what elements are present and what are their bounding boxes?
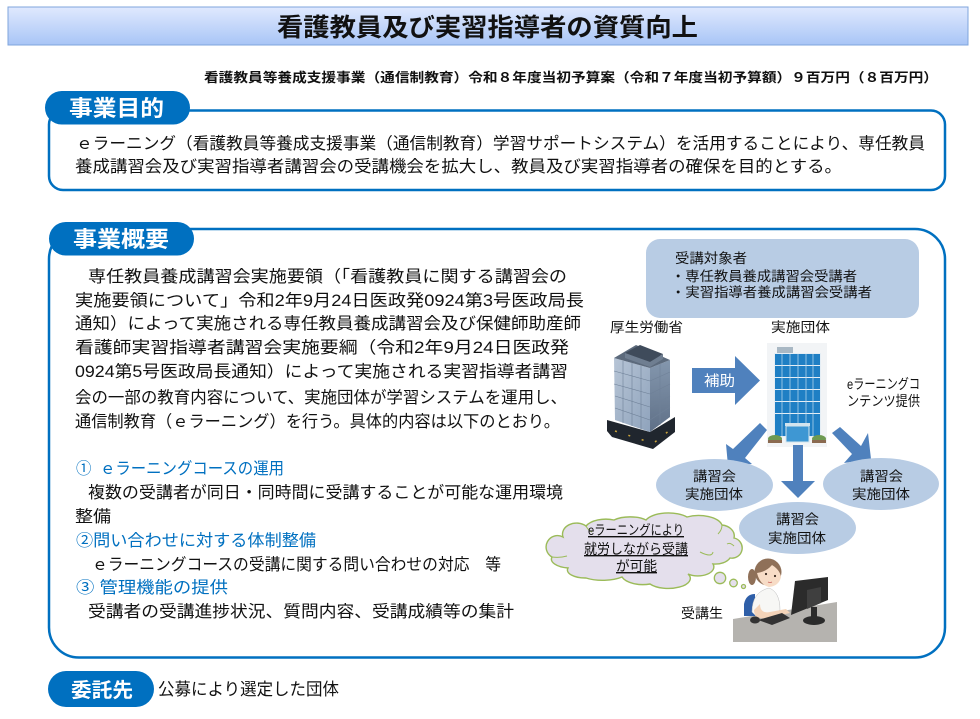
lecture body: centre: 実施団体 <box>768 531 827 546</box>
lecture body: centre: 講習会 <box>776 512 820 527</box>
overview paragraph: 専任教員養成講習会実施要領（「看護教員に関する講習会の <box>88 267 567 286</box>
thought cloud <box>546 513 742 588</box>
target trainees box: ・実習指導者養成講習会受講者 <box>671 284 872 300</box>
overview paragraph: 0924第5号医政局長通知）によって実施される実習指導者講習 <box>75 362 568 381</box>
lecture body: right <box>823 458 939 510</box>
lecture body: left <box>656 459 773 511</box>
item 3: ③ 管理機能の提供 <box>76 578 228 597</box>
label: e-learning content provision: ンテンツ提供 <box>847 393 920 409</box>
item 2 <box>76 531 501 574</box>
thought cloud: 就労しながら受講 <box>584 541 688 557</box>
purpose text: ｅラーニング（看護教員等養成支援事業（通信制教育）学習サポートシステム）を活用することにより、専任教員 <box>76 134 925 153</box>
thought cloud: eラーニングにより <box>588 522 684 538</box>
item 1: ① ｅラーニングコースの運用 <box>76 459 284 478</box>
overview paragraph: 通知）によって実施される専任教員養成講習会及び保健師助産師 <box>75 314 581 333</box>
budget line: 看護教員等養成支援事業（通信制教育）令和８年度当初予算案（令和７年度当初予算額）９百万円（８百万円） <box>204 70 938 85</box>
overview paragraph: 看護師実習指導者講習会実施要綱（令和2年9月24日医政発 <box>75 338 570 357</box>
purpose text: 養成講習会及び実習指導者講習会の受講機会を拡大し、教員及び実習指導者の確保を目的とする。 <box>75 157 842 176</box>
item 1 <box>75 459 563 526</box>
contractor pill <box>48 671 154 707</box>
item 1: 整備 <box>75 507 111 526</box>
thought cloud: が可能 <box>616 558 657 574</box>
lecture body: right: 実施団体 <box>852 487 911 502</box>
icon: ministry building <box>607 345 675 449</box>
label: e-learning content provision <box>847 376 920 409</box>
label: e-learning content provision: eラーニングコ <box>847 376 920 392</box>
overview paragraph <box>75 267 584 431</box>
thought bubbles <box>714 572 746 588</box>
contractor text: 公募により選定した団体 <box>158 680 339 699</box>
heading pill: project overview <box>49 222 194 256</box>
arrow: subsidy: 補助 <box>704 373 735 390</box>
heading pill: project purpose <box>45 91 190 124</box>
overview paragraph: 会の一部の教育内容について、実施団体が学習システムを運用し、 <box>75 388 567 407</box>
label: ministry: 厚生労働省 <box>610 320 683 335</box>
target trainees box: ・専任教員養成講習会受講者 <box>671 268 857 284</box>
lecture body: centre <box>739 502 856 554</box>
lecture body: right: 講習会 <box>860 469 904 484</box>
target trainees box: 受講対象者 <box>675 251 747 266</box>
item 2: ②問い合わせに対する体制整備 <box>76 531 316 550</box>
item 1: 複数の受講者が同日・同時間に受講することが可能な運用環境 <box>88 483 563 502</box>
icon: implementing body building <box>767 343 827 447</box>
arrow: to centre body <box>781 445 815 498</box>
overview paragraph: 実施要領について」令和2年9月24日医政発0924第3号医政局長 <box>75 291 584 310</box>
lecture body: left: 講習会 <box>693 469 737 484</box>
contractor pill: 委託先 <box>71 679 133 702</box>
panel: project overview <box>49 222 945 658</box>
illustration: student at computer <box>733 558 837 642</box>
title: 看護教員及び実習指導者の資質向上 <box>277 14 698 42</box>
item 3 <box>76 578 515 621</box>
target trainees box <box>646 239 919 318</box>
panel: project purpose <box>45 91 945 190</box>
heading pill: project overview: 事業概要 <box>73 227 169 252</box>
item 2: ｅラーニングコースの受講に関する問い合わせの対応 等 <box>92 555 501 574</box>
label: student: 受講生 <box>681 606 723 621</box>
arrow: to left body <box>726 423 767 466</box>
title banner <box>8 7 968 45</box>
overview paragraph: 通信制教育（ｅラーニング）を行う。具体的内容は以下のとおり。 <box>75 412 560 431</box>
purpose text <box>75 134 925 176</box>
lecture body: left: 実施団体 <box>685 487 744 502</box>
label: implementing body: 実施団体 <box>771 320 831 335</box>
item 3: 受講者の受講進捗状況、質問内容、受講成績等の集計 <box>88 602 515 621</box>
arrow: to right body <box>832 427 871 463</box>
arrow: subsidy <box>692 356 760 405</box>
heading pill: project purpose: 事業目的 <box>69 96 164 121</box>
